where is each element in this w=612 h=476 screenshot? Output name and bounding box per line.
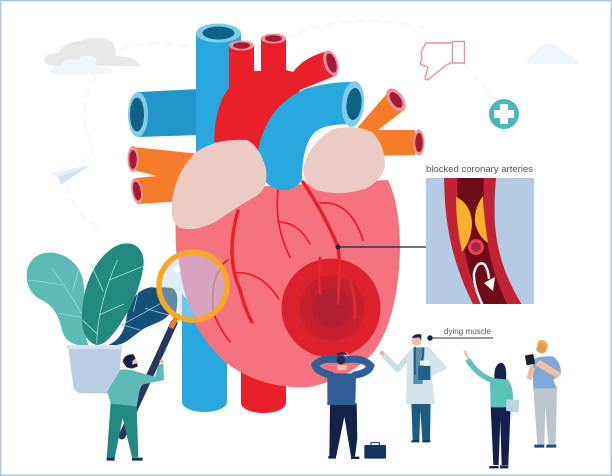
panel: blocked artery: [426, 170, 534, 310]
artery wall: [444, 178, 522, 304]
lumen: [457, 178, 507, 304]
vessel: left orange veins: [128, 146, 200, 205]
person: man with phone: [525, 340, 562, 448]
icon: thumbs down: [420, 42, 464, 80]
briefcase: [364, 443, 386, 459]
person: woman pointing: [464, 351, 519, 468]
vessel: left pulmonary blue: [128, 89, 200, 137]
leaf: dark teal: [82, 243, 144, 345]
leaf: dark blue: [108, 287, 172, 345]
magnifying glass: [122, 250, 230, 436]
icon: flow arrow: [474, 263, 495, 306]
person: doctor: [380, 334, 448, 442]
vessel: pulmonary artery: [258, 80, 366, 190]
label: dying muscle: dying muscle: [444, 327, 492, 336]
icon: medical cross: [489, 99, 519, 129]
heart muscle: [176, 180, 400, 387]
icon: paper airplane: [50, 165, 90, 185]
person: man with magnifier: [107, 354, 164, 461]
vessel: right orange veins: [358, 85, 424, 156]
infarct zone: dying muscle: [282, 258, 380, 358]
vena cava: lower blue tube: [182, 290, 227, 412]
coronary arteries: [211, 182, 363, 342]
pot: [68, 347, 122, 393]
lens view: [162, 254, 224, 318]
blood cell: [468, 239, 484, 255]
cloud: grey left: [44, 38, 140, 66]
person: distressed man: [315, 352, 371, 459]
leader line: coronary artery to panel: [336, 244, 426, 250]
plant: [27, 243, 172, 393]
heading: blocked coronary arteries: blocked coronary arteries: [426, 164, 533, 175]
label: dying muscle: [427, 327, 493, 341]
cloud: light blue left: [50, 55, 114, 74]
plaque: left: [456, 197, 472, 252]
vessel: aorta: [214, 34, 342, 152]
vessel: superior vena cava: [196, 24, 241, 170]
left atrium: [172, 140, 266, 229]
right atrium: [303, 127, 385, 193]
aorta lower red tube: [241, 370, 286, 413]
leaf: light teal: [27, 253, 88, 345]
dashed flight paths: [68, 20, 497, 230]
people group: [315, 334, 562, 468]
plaque: right: [475, 196, 488, 243]
cloud: light blue right: [527, 44, 579, 64]
